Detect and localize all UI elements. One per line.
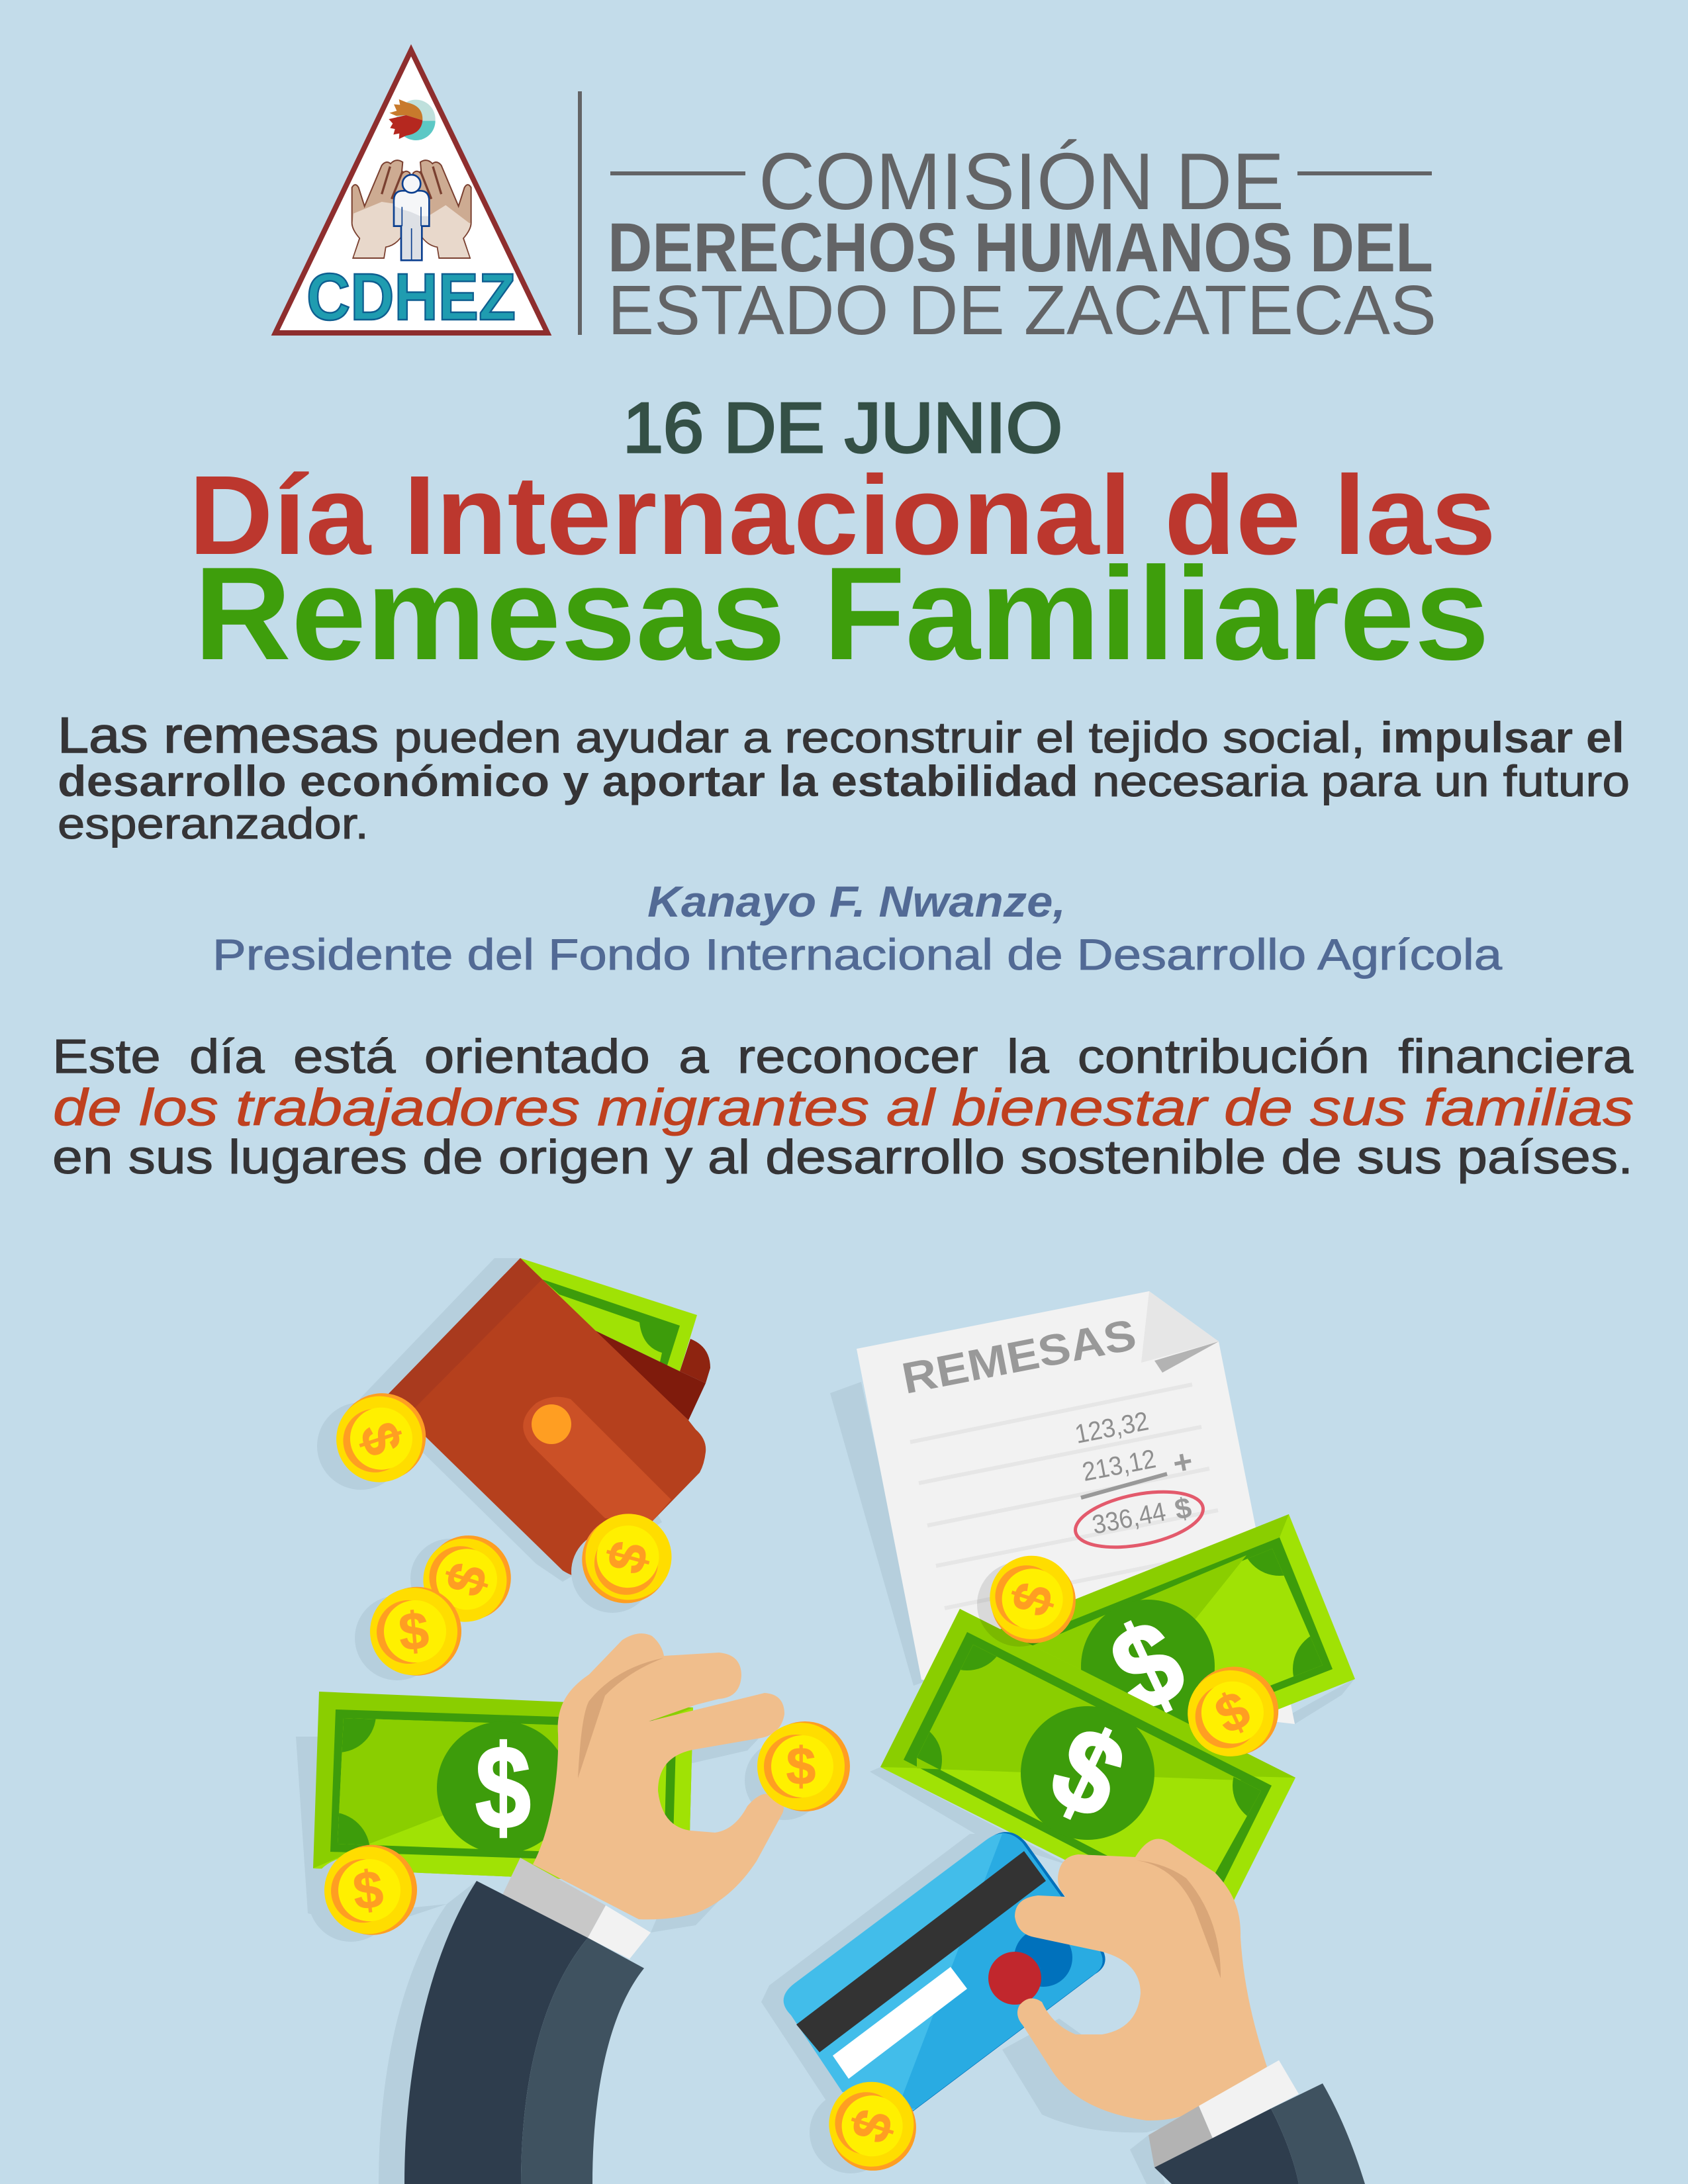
quote attribution: Kanayo F. Nwanze, <box>647 877 1066 926</box>
coin 3: $ <box>397 1600 431 1662</box>
receipt figures: 213,12 <box>1080 1444 1158 1487</box>
coin 9 <box>817 2071 928 2182</box>
back banknote <box>1000 1514 1355 1725</box>
coin 2 <box>412 1524 522 1634</box>
hand right <box>1015 1839 1267 2120</box>
organization name <box>608 136 1436 349</box>
receipt figures <box>1072 1406 1168 1540</box>
quote text: esperanzador. <box>58 799 369 848</box>
wallet button <box>532 1404 571 1444</box>
header divider <box>578 91 582 335</box>
coin 5 <box>757 1721 850 1811</box>
description paragraph <box>52 1030 1634 1184</box>
front banknote <box>880 1609 1295 1900</box>
back banknote: $ <box>1093 1594 1202 1738</box>
coin 7 <box>978 1545 1087 1654</box>
logo: sun emblem <box>389 99 436 140</box>
description paragraph: de los trabajadores migrantes al bienestar de sus familias <box>53 1078 1634 1136</box>
description paragraph: Este día está orientado a reconocer la contribución financiera <box>52 1030 1634 1083</box>
hand left <box>533 1633 784 1919</box>
organization name: ESTADO DE ZACATECAS <box>608 271 1436 349</box>
coin 6 <box>320 1841 422 1940</box>
paper fold <box>1141 1291 1219 1363</box>
coin 4 <box>572 1504 681 1614</box>
paper receipt: + <box>1170 1442 1196 1482</box>
logo: hands and person <box>352 160 471 260</box>
date heading: 16 DE JUNIO <box>623 388 1062 467</box>
wallet clasp <box>523 1397 671 1522</box>
credit card <box>784 1832 1105 2111</box>
red circle around total <box>1071 1482 1207 1557</box>
banknote in wallet <box>520 1258 697 1371</box>
receipt figures: 123,32 <box>1072 1406 1151 1449</box>
coin 8: $ <box>1207 1679 1258 1745</box>
magnetic stripe <box>796 1851 1046 2052</box>
receipt heading: REMESAS <box>898 1310 1140 1403</box>
organization name: DERECHOS HUMANOS DEL <box>608 209 1433 287</box>
quote text: Las remesas <box>58 707 379 764</box>
coin 8 <box>1173 1652 1293 1771</box>
sleeve left <box>404 1858 651 2184</box>
cash left <box>313 1692 693 1879</box>
coin 1: $ <box>348 1416 414 1462</box>
quote text: necesaria para un futuro <box>1092 756 1630 805</box>
organization name: COMISIÓN DE <box>759 136 1284 226</box>
quote attribution <box>212 877 1502 979</box>
coin shadows <box>308 1402 1062 2173</box>
logo: CDHEZ lettering: CDHEZ <box>306 260 516 334</box>
description paragraph: en sus lugares de origen y al desarrollo sostenible de sus países. <box>52 1131 1633 1184</box>
quote text: desarrollo económico y aportar la estabilidad <box>58 756 1078 805</box>
coin 6: $ <box>350 1859 386 1921</box>
cash left: $ <box>475 1721 531 1853</box>
quote text: impulsar el <box>1380 713 1624 762</box>
coin 4: $ <box>595 1535 660 1579</box>
receipt figures: 336,44 <box>1090 1497 1168 1540</box>
paper receipt <box>857 1291 1295 1724</box>
quote attribution: Presidente del Fondo Internacional de Desarrollo Agrícola <box>212 930 1502 979</box>
wallet <box>387 1258 710 1578</box>
quote text <box>58 707 1630 848</box>
knuckle crease <box>1137 1860 1221 1978</box>
coin 3 <box>366 1583 465 1680</box>
coin 2: $ <box>434 1556 499 1602</box>
coin 7: $ <box>1000 1576 1064 1622</box>
palm crease <box>578 1658 664 1778</box>
sleeve right <box>1149 2060 1365 2184</box>
illustration shadows <box>296 1258 1355 2184</box>
paper receipt: $ <box>1172 1491 1194 1526</box>
logo: CDHEZ triangle <box>275 50 547 334</box>
coin 5: $ <box>786 1737 816 1796</box>
quote text: pueden ayudar a reconstruir el tejido social, <box>394 713 1365 762</box>
front banknote: $ <box>1033 1700 1143 1844</box>
title line 1: Día Internacional de las <box>189 453 1496 578</box>
card logo <box>1014 1929 1072 1987</box>
title line 2: Remesas Familiares <box>194 540 1489 688</box>
coin 9: $ <box>839 2103 904 2149</box>
signature strip <box>833 1967 967 2079</box>
coin 1 <box>324 1382 438 1494</box>
ruled lines <box>910 1385 1226 1608</box>
